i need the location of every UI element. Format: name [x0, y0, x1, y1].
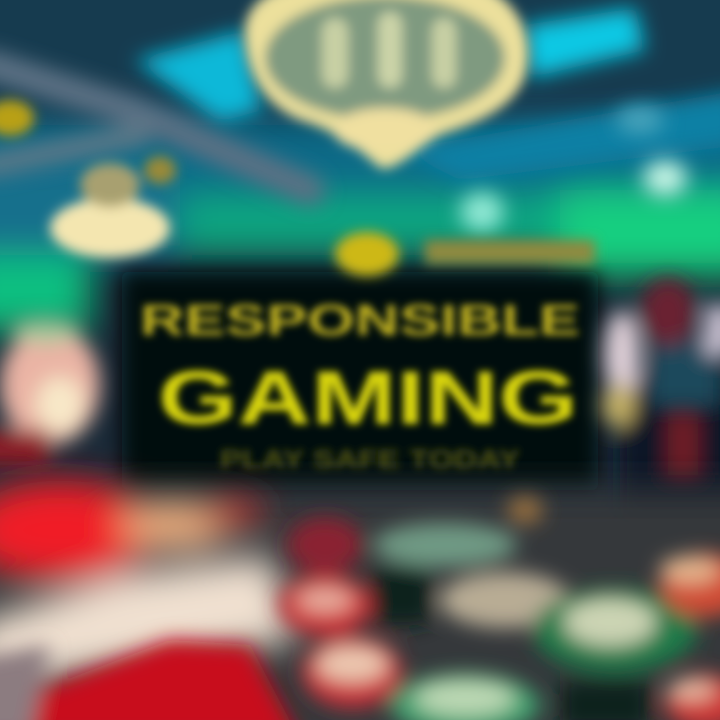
poker chips: [279, 496, 720, 720]
casino table with chips: [0, 480, 720, 720]
ceiling lights: [460, 106, 687, 232]
sign: [122, 232, 598, 490]
person left: [0, 318, 100, 465]
ceiling cyan panels: [135, 8, 720, 180]
sign heading: gaming: GAMING: [158, 356, 578, 441]
sign heading: responsible: RESPONSIBLE: [140, 296, 580, 345]
sign top ornament: [335, 232, 595, 276]
sign board: [122, 272, 598, 490]
table surface: [0, 490, 720, 720]
person right: [602, 278, 720, 525]
red cloth: [0, 480, 300, 690]
sign subtitle: PLAY SAFE TODAY: [220, 444, 520, 474]
small chandelier: [0, 100, 176, 258]
main chandelier: [245, 0, 528, 168]
ceiling beams: [0, 65, 310, 190]
